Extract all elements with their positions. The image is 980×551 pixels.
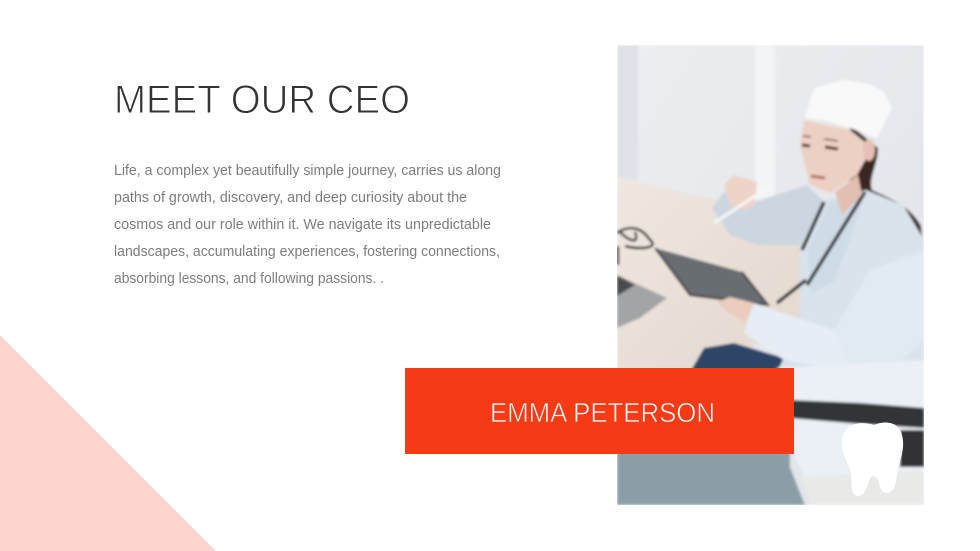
desk xyxy=(617,177,810,372)
photo: doctor at desk xyxy=(617,45,924,505)
body text: paths of growth, discovery, and deep curiosity about the xyxy=(114,189,467,206)
stethoscope xyxy=(777,192,865,303)
laptop xyxy=(617,275,667,328)
wall xyxy=(617,45,924,505)
floor xyxy=(823,470,923,504)
body text: absorbing lessons, and following passions. . xyxy=(114,270,384,287)
name: EMMA PETERSON xyxy=(490,397,715,428)
corner triangle xyxy=(0,335,216,551)
cap xyxy=(805,80,892,138)
body text: cosmos and our role within it. We navigate its unpredictable xyxy=(114,216,491,233)
body text: Life, a complex yet beautifully simple journey, carries us along xyxy=(114,162,501,179)
ear xyxy=(863,139,875,161)
chair band xyxy=(790,400,924,428)
face xyxy=(800,120,872,193)
jeans xyxy=(690,343,784,372)
tablet xyxy=(655,248,768,305)
hair xyxy=(848,127,924,236)
name banner xyxy=(405,368,794,454)
eyes and mouth xyxy=(802,145,838,149)
left hand xyxy=(724,175,757,210)
skirt xyxy=(617,450,806,505)
right arm upper xyxy=(834,250,924,380)
title: MEET OUR CEO xyxy=(114,78,410,122)
icon: tooth xyxy=(842,423,903,496)
cables xyxy=(617,228,653,265)
lower coat xyxy=(777,360,924,478)
left sleeve xyxy=(712,185,824,245)
coat torso xyxy=(780,188,924,367)
body text xyxy=(114,162,501,287)
right sleeve xyxy=(744,301,847,366)
right hand xyxy=(717,297,754,322)
body text: landscapes, accumulating experiences, fostering connections, xyxy=(114,243,500,260)
pen xyxy=(713,194,757,224)
